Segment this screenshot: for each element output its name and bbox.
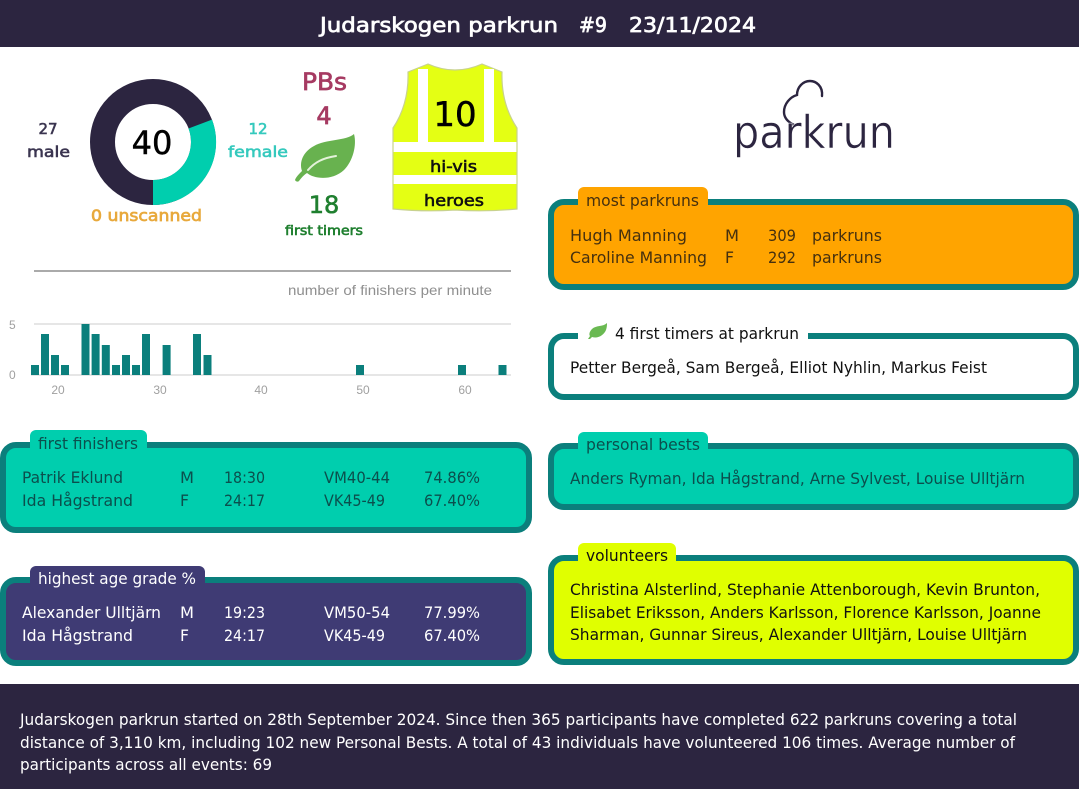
- vest label: hi-vis: [430, 157, 477, 176]
- panel: volunteers: Christina Alsterlind, Stephanie Attenborough, Kevin Brunton,: [570, 580, 1040, 599]
- panel: volunteers: volunteers: [586, 546, 668, 565]
- panel: personal bests: personal bests: [586, 435, 700, 454]
- panel: first finishers: first finishers: [38, 434, 138, 453]
- PBs count: 4: [316, 102, 332, 130]
- panel: first finishers: Ida Hågstrand: [22, 491, 133, 510]
- panel: most parkruns: most parkruns: [586, 191, 699, 210]
- first timers count: first timers: [285, 224, 363, 239]
- panel: highest age grade: 77.99%: [424, 603, 480, 622]
- PBs count: PBs: [302, 68, 347, 96]
- title: Judarskogen parkrun: [318, 13, 558, 37]
- footer summary: [0, 684, 1079, 789]
- chart title: number of finishers per minute: [288, 282, 492, 298]
- panel: most parkruns: F: [725, 248, 734, 267]
- panel: first timers: 4 first timers at parkrun: [615, 324, 799, 343]
- panel: first finishers: VK45-49: [324, 491, 385, 510]
- header banner: [0, 0, 1079, 47]
- panel: highest age grade: VM50-54: [324, 603, 390, 622]
- female count: female: [228, 143, 288, 161]
- panel: first finishers: F: [180, 491, 189, 510]
- panel: first finishers: [3, 430, 529, 530]
- footer summary: distance of 3,110 km, including 102 new Personal Bests. A total of 43 individuals have volunteered 106 times. Average number of: [20, 733, 1015, 752]
- panel: highest age grade: F: [180, 626, 189, 645]
- panel: most parkruns: M: [725, 226, 739, 245]
- panel: most parkruns: Hugh Manning: [570, 226, 687, 245]
- panel: first finishers: 18:30: [224, 468, 265, 487]
- bar chart: finishers per minute: 50: [356, 383, 370, 397]
- panel: volunteers: Elisabet Eriksson, Anders Karlsson, Florence Karlsson, Joanne: [570, 603, 1041, 622]
- panel: most parkruns: parkruns: [812, 226, 882, 245]
- panel: highest age grade: 24:17: [224, 626, 265, 645]
- panel: first finishers: Patrik Eklund: [22, 468, 123, 487]
- footer summary: participants across all events: 69: [20, 755, 272, 774]
- bar chart: finishers per minute: 60: [458, 383, 472, 397]
- panel: highest age grade: 19:23: [224, 603, 265, 622]
- panel: highest age grade: M: [180, 603, 194, 622]
- male count: 27: [38, 120, 58, 138]
- female count: [228, 120, 288, 161]
- panel: first finishers: 74.86%: [424, 468, 480, 487]
- unscanned count: 0 unscanned: [91, 206, 202, 225]
- panel: highest age grade: Alexander Ulltjärn: [22, 603, 161, 622]
- panel: personal bests: [551, 432, 1076, 507]
- panel: first timers: [551, 323, 1076, 397]
- panel: highest age grade: Ida Hågstrand: [22, 626, 133, 645]
- panel: first finishers: VM40-44: [324, 468, 390, 487]
- vest number: 10: [433, 95, 477, 135]
- panel: first timers: Petter Bergeå, Sam Bergeå, Elliot Nyhlin, Markus Feist: [570, 358, 987, 377]
- bar chart: finishers per minute: 40: [254, 383, 268, 397]
- parkrun logo: [733, 81, 895, 159]
- title: [318, 13, 756, 37]
- bar chart: finishers per minute: 20: [51, 383, 65, 397]
- bar chart: finishers per minute: 5: [9, 318, 16, 332]
- panel: volunteers: [551, 543, 1076, 662]
- male count: [27, 120, 70, 161]
- panel: highest age grade: [3, 566, 529, 663]
- first timers count: 18: [309, 191, 339, 219]
- first timers count: [285, 191, 363, 239]
- panel: personal bests: Anders Ryman, Ida Hågstrand, Arne Sylvest, Louise Ulltjärn: [570, 469, 1025, 488]
- male count: male: [27, 143, 70, 161]
- panel: first finishers: 24:17: [224, 491, 265, 510]
- title: 23/11/2024: [629, 13, 756, 37]
- icon: hi-vis vest: heroes: [424, 191, 484, 210]
- panel: most parkruns: Caroline Manning: [570, 248, 707, 267]
- panel: first finishers: 67.40%: [424, 491, 480, 510]
- panel: first finishers: M: [180, 468, 194, 487]
- footer summary: Judarskogen parkrun started on 28th September 2024. Since then 365 participants have completed 622 parkruns covering a total: [19, 710, 1017, 729]
- panel: volunteers: Sharman, Gunnar Sireus, Alexander Ulltjärn, Louise Ulltjärn: [570, 625, 1027, 644]
- panel: highest age grade: VK45-49: [324, 626, 385, 645]
- title: #9: [579, 13, 607, 37]
- icon: small leaf: [588, 323, 607, 339]
- bar chart: finishers per minute: [9, 271, 511, 397]
- panel: most parkruns: [551, 187, 1076, 287]
- panel: highest age grade: 67.40%: [424, 626, 480, 645]
- panel: most parkruns: parkruns: [812, 248, 882, 267]
- panel: highest age grade: highest age grade %: [38, 569, 196, 588]
- parkrun logo: parkrun: [733, 106, 895, 159]
- icon: hi-vis vest: [393, 64, 517, 211]
- panel: most parkruns: 309: [768, 226, 796, 245]
- bar chart: finishers per minute: 0: [9, 368, 16, 382]
- panel: most parkruns: 292: [768, 248, 796, 267]
- donut chart: participants by gender: 40: [132, 124, 172, 162]
- PBs count: [302, 68, 347, 130]
- icon: green leaf: [295, 134, 355, 182]
- female count: 12: [248, 120, 268, 138]
- donut chart: participants by gender: [102, 92, 216, 205]
- bar chart: finishers per minute: 30: [153, 383, 167, 397]
